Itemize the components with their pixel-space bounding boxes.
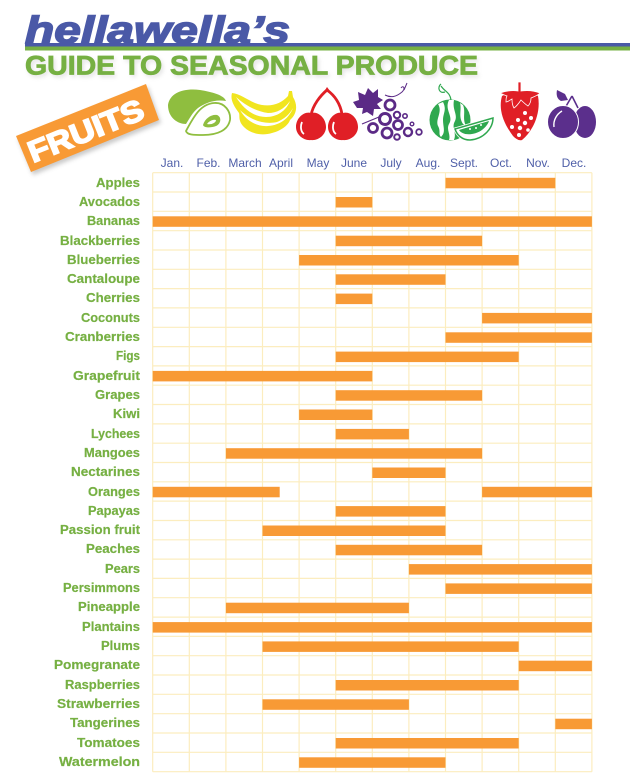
row: Cherries — [86, 291, 372, 305]
row: Figs: Figs — [116, 349, 140, 363]
row: Plums — [101, 639, 519, 653]
row: Nectarines: Nectarines — [71, 465, 140, 479]
row: Pomegranate — [54, 658, 592, 672]
month header: June — [341, 156, 367, 170]
row: Tangerines — [70, 716, 592, 730]
row: Cranberries: Cranberries — [65, 330, 140, 344]
row: Tomatoes: Tomatoes — [77, 736, 140, 750]
row: Bananas: Bananas — [87, 214, 140, 228]
row: Persimmons: Persimmons — [63, 581, 140, 595]
month header: Sept. — [450, 156, 478, 170]
row: Raspberries: Raspberries — [65, 678, 140, 692]
row: Watermelon: Watermelon — [59, 755, 140, 769]
row: Watermelon — [59, 755, 446, 769]
row: Nectarines — [71, 465, 446, 479]
row: Grapes: Grapes — [95, 388, 140, 402]
row: Figs — [116, 349, 519, 363]
row: Apples — [96, 176, 555, 190]
row: Tangerines: Tangerines — [70, 716, 140, 730]
row: Grapes — [95, 388, 482, 402]
section banner: fruits — [16, 84, 161, 175]
row: Apples: Apples — [96, 176, 140, 190]
row: Plantains: Plantains — [82, 620, 140, 634]
subtitle: GUIDE TO SEASONAL PRODUCE — [27, 53, 480, 83]
row: Grapefruit — [73, 369, 372, 383]
row: Mangoes: Mangoes — [84, 446, 140, 460]
month header: Aug. — [416, 156, 440, 170]
icon: grapes — [353, 83, 422, 140]
row: Blackberries: Blackberries — [60, 234, 140, 248]
row: Cantaloupe: Cantaloupe — [67, 272, 140, 286]
subtitle: GUIDE TO SEASONAL PRODUCE — [25, 50, 478, 80]
month header: Dec. — [562, 156, 586, 170]
row: Persimmons — [63, 581, 592, 595]
row: Oranges: Oranges — [88, 485, 140, 499]
icon: watermelon — [430, 84, 493, 140]
month header — [161, 156, 586, 170]
row: Oranges — [88, 485, 592, 499]
row: Grapefruit: Grapefruit — [73, 369, 141, 383]
row: Coconuts — [81, 311, 592, 325]
row: Tomatoes — [77, 736, 519, 750]
icon: plums — [548, 90, 596, 138]
row: Cherries: Cherries — [86, 291, 140, 305]
row: Lychees — [91, 427, 409, 441]
row: Pineapple: Pineapple — [78, 600, 140, 614]
row: Kiwi — [113, 407, 372, 421]
icon: avocado — [168, 90, 230, 135]
seasonal chart — [54, 176, 592, 769]
row: Cantaloupe — [67, 272, 446, 286]
brand title: hellawella’s — [25, 10, 290, 52]
row: Kiwi: Kiwi — [113, 407, 140, 421]
month header: April — [269, 156, 293, 170]
row: Avocados — [79, 195, 372, 209]
row: Plantains — [82, 620, 592, 634]
row: Plums: Plums — [101, 639, 140, 653]
row: Blueberries — [67, 253, 519, 267]
row: Peaches: Peaches — [86, 542, 140, 556]
row: Raspberries — [65, 678, 519, 692]
month header: May — [307, 156, 329, 170]
icon: strawberry — [500, 82, 540, 140]
month header: July — [380, 156, 402, 170]
row: Pears: Pears — [105, 562, 140, 576]
row: Strawberries: Strawberries — [57, 697, 140, 711]
month header: Oct. — [490, 156, 512, 170]
row: Coconuts: Coconuts — [81, 311, 140, 325]
month header: Feb. — [196, 156, 221, 170]
row: Bananas — [87, 214, 592, 228]
icon: bananas — [231, 91, 296, 134]
row: Mangoes — [84, 446, 482, 460]
row: Pineapple — [78, 600, 409, 614]
row: Pomegranate: Pomegranate — [54, 658, 140, 672]
row: Passion fruit — [60, 523, 446, 537]
row: Cranberries — [65, 330, 592, 344]
row: Lychees: Lychees — [91, 427, 140, 441]
month header: March — [228, 156, 262, 170]
row: Blackberries — [60, 234, 482, 248]
row: Passion fruit: Passion fruit — [60, 523, 141, 537]
section banner: fruits: FRUITS — [23, 94, 149, 169]
row: Pears — [105, 562, 592, 576]
month header: Nov. — [526, 156, 550, 170]
row: Avocados: Avocados — [79, 195, 140, 209]
row: Blueberries: Blueberries — [67, 253, 140, 267]
row: Papayas: Papayas — [88, 504, 140, 518]
row: Papayas — [88, 504, 446, 518]
row: Strawberries — [57, 697, 409, 711]
brand title — [25, 10, 630, 52]
row: Peaches — [86, 542, 482, 556]
month header: Jan. — [161, 156, 183, 170]
icon: cherries — [296, 87, 358, 140]
